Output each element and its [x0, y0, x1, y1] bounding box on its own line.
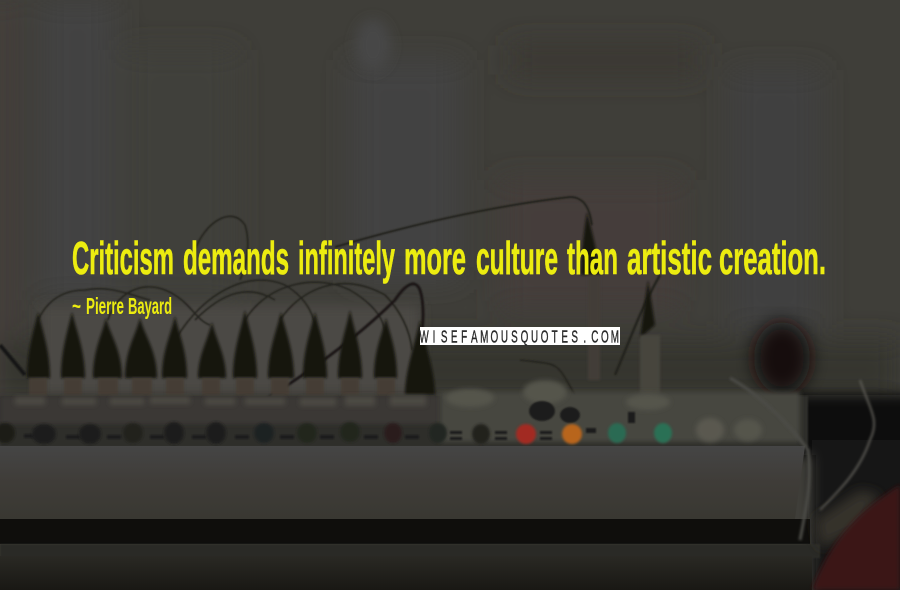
- author attribution: Pierre: [86, 293, 124, 319]
- quote text: infinitely: [298, 232, 395, 284]
- author attribution: ~: [72, 293, 81, 319]
- quote text: [72, 232, 826, 284]
- mixer control surface: [0, 380, 808, 447]
- quote text: Criticism: [72, 232, 174, 284]
- quote text: artistic: [627, 232, 712, 284]
- tan connector bodies: [29, 275, 660, 405]
- right side cables and red object: [730, 378, 900, 590]
- mixer knobs: [0, 422, 672, 444]
- audio cables: [0, 197, 660, 415]
- author attribution: [72, 293, 172, 319]
- mixer front panel: [0, 446, 820, 590]
- author attribution: Bayard: [128, 293, 172, 319]
- quote text: more: [404, 232, 466, 284]
- quote text: than: [567, 232, 618, 284]
- quote text: demands: [183, 232, 289, 284]
- black cable connectors: [27, 212, 655, 395]
- dark blurred object at right: [754, 322, 900, 590]
- quote text: culture: [476, 232, 558, 284]
- logo: wisefamousquotes.com: WISEFAMOUSQUOTES.COM: [419, 328, 619, 347]
- light backdrop behind connectors: [40, 305, 420, 395]
